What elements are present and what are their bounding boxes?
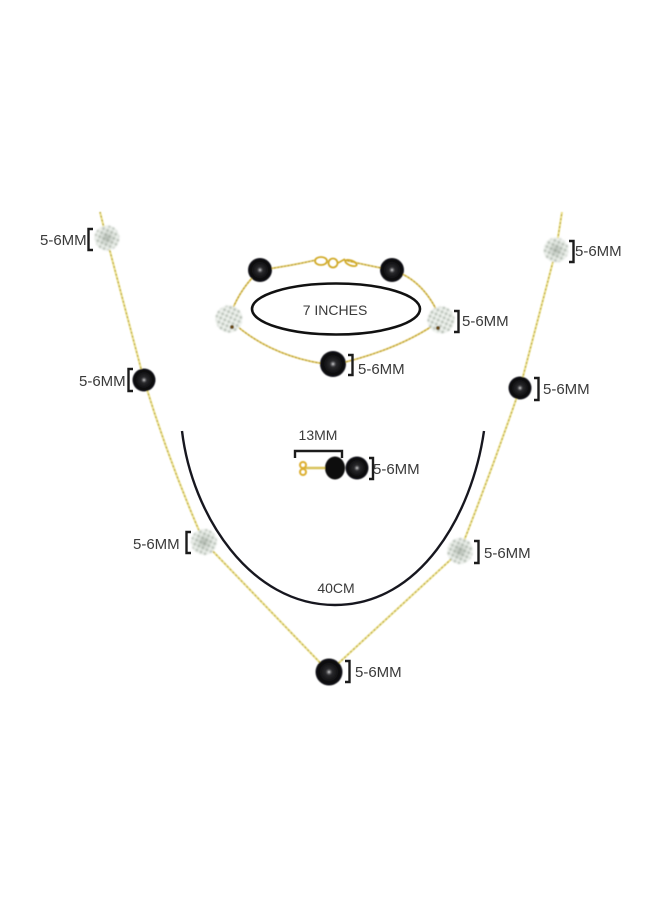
label: 13MM: 13MM <box>299 427 337 443</box>
pearl: upper left <box>132 368 156 392</box>
size label: bracelet crystal: 5-6MM <box>462 313 509 330</box>
size label: upper left pearl <box>79 369 133 391</box>
size label: upper left crystal: 5-6MM <box>40 232 87 249</box>
earring pearl: front view <box>346 456 368 480</box>
bracelet crystal: left <box>216 306 242 332</box>
bracelet pearl: bottom <box>320 351 346 377</box>
bracelet clasp <box>315 257 357 268</box>
size label: bracelet pearl: 5-6MM <box>358 361 405 378</box>
size label: upper right pearl: 5-6MM <box>543 381 590 398</box>
label: 40CM: 40CM <box>317 580 355 596</box>
pearl: bottom centre <box>316 658 342 686</box>
crystal bead: upper left <box>94 226 120 250</box>
earring width bracket <box>295 451 342 458</box>
necklace length curve <box>182 431 484 605</box>
bracelet chain <box>229 260 441 365</box>
size label: bracelet crystal <box>454 311 509 332</box>
crystal bead: lower left <box>191 529 217 555</box>
size label: lower right crystal <box>474 541 531 563</box>
earring bead bracket <box>369 458 373 479</box>
size label: bottom pearl: 5-6MM <box>355 664 402 681</box>
bracelet pearl: top left <box>248 258 272 282</box>
size label: lower left crystal <box>133 532 191 553</box>
size label: lower left crystal: 5-6MM <box>133 536 180 553</box>
earrings <box>300 456 368 480</box>
bracelet pearl: top right <box>380 258 404 282</box>
crystal bead: upper right <box>544 238 568 262</box>
pearl: upper right <box>508 376 532 400</box>
size label: upper right pearl <box>534 378 590 400</box>
label: earring bead size: 5-6MM <box>373 461 420 478</box>
bracelet crystal: right <box>428 306 454 334</box>
necklace chain <box>100 212 562 672</box>
size label: upper left pearl: 5-6MM <box>79 373 126 390</box>
size label: bracelet pearl <box>348 355 405 378</box>
necklace <box>94 212 568 686</box>
label: 7 inches: 7 INCHES <box>303 302 367 318</box>
crystal bead: lower right <box>447 538 473 564</box>
bracelet length oval <box>252 284 420 334</box>
size label: bottom pearl <box>345 661 402 682</box>
size label: lower right crystal: 5-6MM <box>484 545 531 562</box>
earring post and back <box>300 462 328 475</box>
earring pearl: side view <box>325 456 345 480</box>
bracelet <box>216 257 454 377</box>
size label: upper right crystal: 5-6MM <box>575 243 622 260</box>
